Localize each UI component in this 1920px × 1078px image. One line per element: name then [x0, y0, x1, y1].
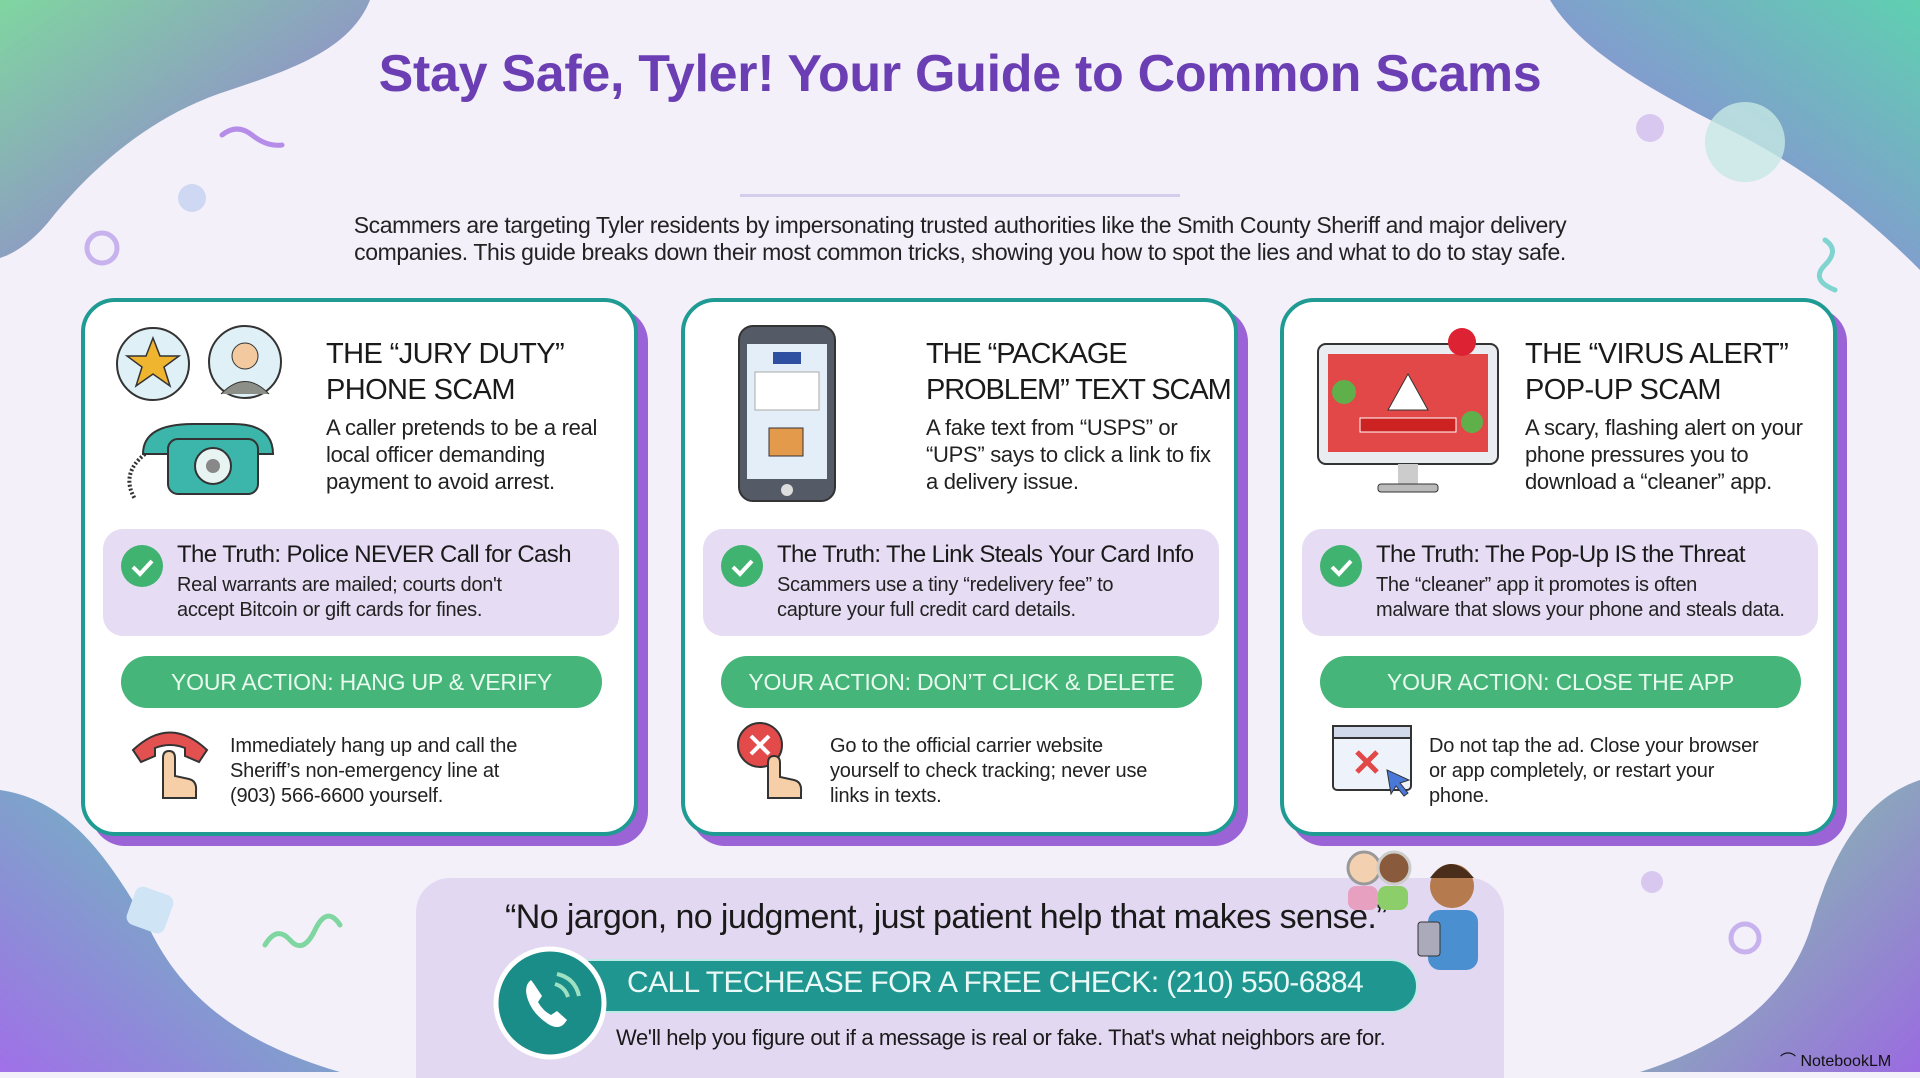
- heading: PROBLEM” TEXT SCAM: [926, 374, 1231, 406]
- description: a delivery issue.: [926, 469, 1079, 494]
- heading: POP-UP SCAM: [1525, 374, 1721, 406]
- icon: hang up: [132, 732, 208, 799]
- truth box: Scammers use a tiny “redelivery fee” to: [777, 574, 1113, 596]
- subtext: We'll help you figure out if a message is real or fake. That's what neighbors are for.: [616, 1025, 1385, 1050]
- action text: [830, 735, 1147, 807]
- truth box: capture your full credit card details.: [777, 599, 1076, 621]
- truth box: The Truth: The Pop-Up IS the Threat: [1376, 541, 1745, 568]
- icon: no click: [737, 722, 802, 799]
- action text: Go to the official carrier website: [830, 735, 1103, 757]
- action button: YOUR ACTION: CLOSE THE APP: [1387, 669, 1734, 695]
- action text: Sheriff’s non-emergency line at: [230, 760, 499, 782]
- action button: [121, 656, 602, 708]
- action button: [1320, 656, 1801, 708]
- panel: call to action: [416, 878, 1504, 1078]
- truth box: The Truth: Police NEVER Call for Cash: [177, 541, 571, 568]
- description: A caller pretends to be a real: [326, 415, 597, 440]
- truth box: [1302, 529, 1818, 636]
- description: [926, 415, 1211, 494]
- icon: phone circle: [494, 946, 606, 1060]
- description: “UPS” says to click a link to fix: [926, 442, 1211, 467]
- panel: virus alert: [1280, 298, 1837, 836]
- heading: PHONE SCAM: [326, 374, 515, 406]
- heading: THE “PACKAGE: [926, 338, 1127, 370]
- action text: [1429, 735, 1758, 807]
- icon: helper people: [1346, 850, 1478, 970]
- description: download a “cleaner” app.: [1525, 469, 1772, 494]
- truth box: accept Bitcoin or gift cards for fines.: [177, 599, 482, 621]
- action text: or app completely, or restart your: [1429, 760, 1714, 782]
- intro text: companies. This guide breaks down their most common tricks, showing you how to spot the lies and what to do to stay safe.: [354, 239, 1566, 265]
- description: A fake text from “USPS” or: [926, 415, 1177, 440]
- heading: THE “VIRUS ALERT”: [1525, 338, 1788, 370]
- action text: Immediately hang up and call the: [230, 735, 517, 757]
- intro text: [354, 212, 1566, 265]
- icon: phone with badge and officer: [116, 325, 282, 499]
- action button: YOUR ACTION: DON’T CLICK & DELETE: [748, 669, 1175, 695]
- action text: Do not tap the ad. Close your browser: [1429, 735, 1758, 757]
- intro text: Scammers are targeting Tyler residents by impersonating trusted authorities like the Smith County Sheriff and major delivery: [354, 212, 1566, 238]
- truth box: The Truth: The Link Steals Your Card Info: [777, 541, 1194, 568]
- call bar text: CALL TECHEASE FOR A FREE CHECK: (210) 550-6884: [627, 966, 1363, 999]
- action text: (903) 566-6600 yourself.: [230, 785, 443, 807]
- action text: yourself to check tracking; never use: [830, 760, 1147, 782]
- icon: phone with package text: [738, 325, 836, 502]
- description: A scary, flashing alert on your: [1525, 415, 1803, 440]
- quote: “No jargon, no judgment, just patient help that makes sense.”: [505, 898, 1387, 936]
- truth box: [703, 529, 1219, 636]
- action text: phone.: [1429, 785, 1489, 807]
- action text: links in texts.: [830, 785, 941, 807]
- action button: YOUR ACTION: HANG UP & VERIFY: [171, 669, 552, 695]
- teal call bar: [514, 959, 1418, 1013]
- description: phone pressures you to: [1525, 442, 1748, 467]
- heading: [1525, 338, 1788, 406]
- action text: [230, 735, 517, 807]
- description: [1525, 415, 1803, 494]
- title: Stay Safe, Tyler! Your Guide to Common Scams: [379, 45, 1541, 103]
- icon: close window: [1332, 725, 1412, 797]
- truth box: malware that slows your phone and steals data.: [1376, 599, 1785, 621]
- heading: THE “JURY DUTY”: [326, 338, 564, 370]
- panel: package scam: [681, 298, 1238, 836]
- icon: monitor with alert: [1317, 328, 1499, 492]
- panel: jury duty scam: [81, 298, 638, 836]
- watermark: ⌒ NotebookLM: [1780, 1053, 1891, 1070]
- truth box: Real warrants are mailed; courts don't: [177, 574, 502, 596]
- heading: [326, 338, 564, 406]
- truth box: The “cleaner” app it promotes is often: [1376, 574, 1697, 596]
- heading: [926, 338, 1231, 406]
- action button: [721, 656, 1202, 708]
- description: [326, 415, 597, 494]
- description: local officer demanding: [326, 442, 545, 467]
- description: payment to avoid arrest.: [326, 469, 555, 494]
- truth box: [103, 529, 619, 636]
